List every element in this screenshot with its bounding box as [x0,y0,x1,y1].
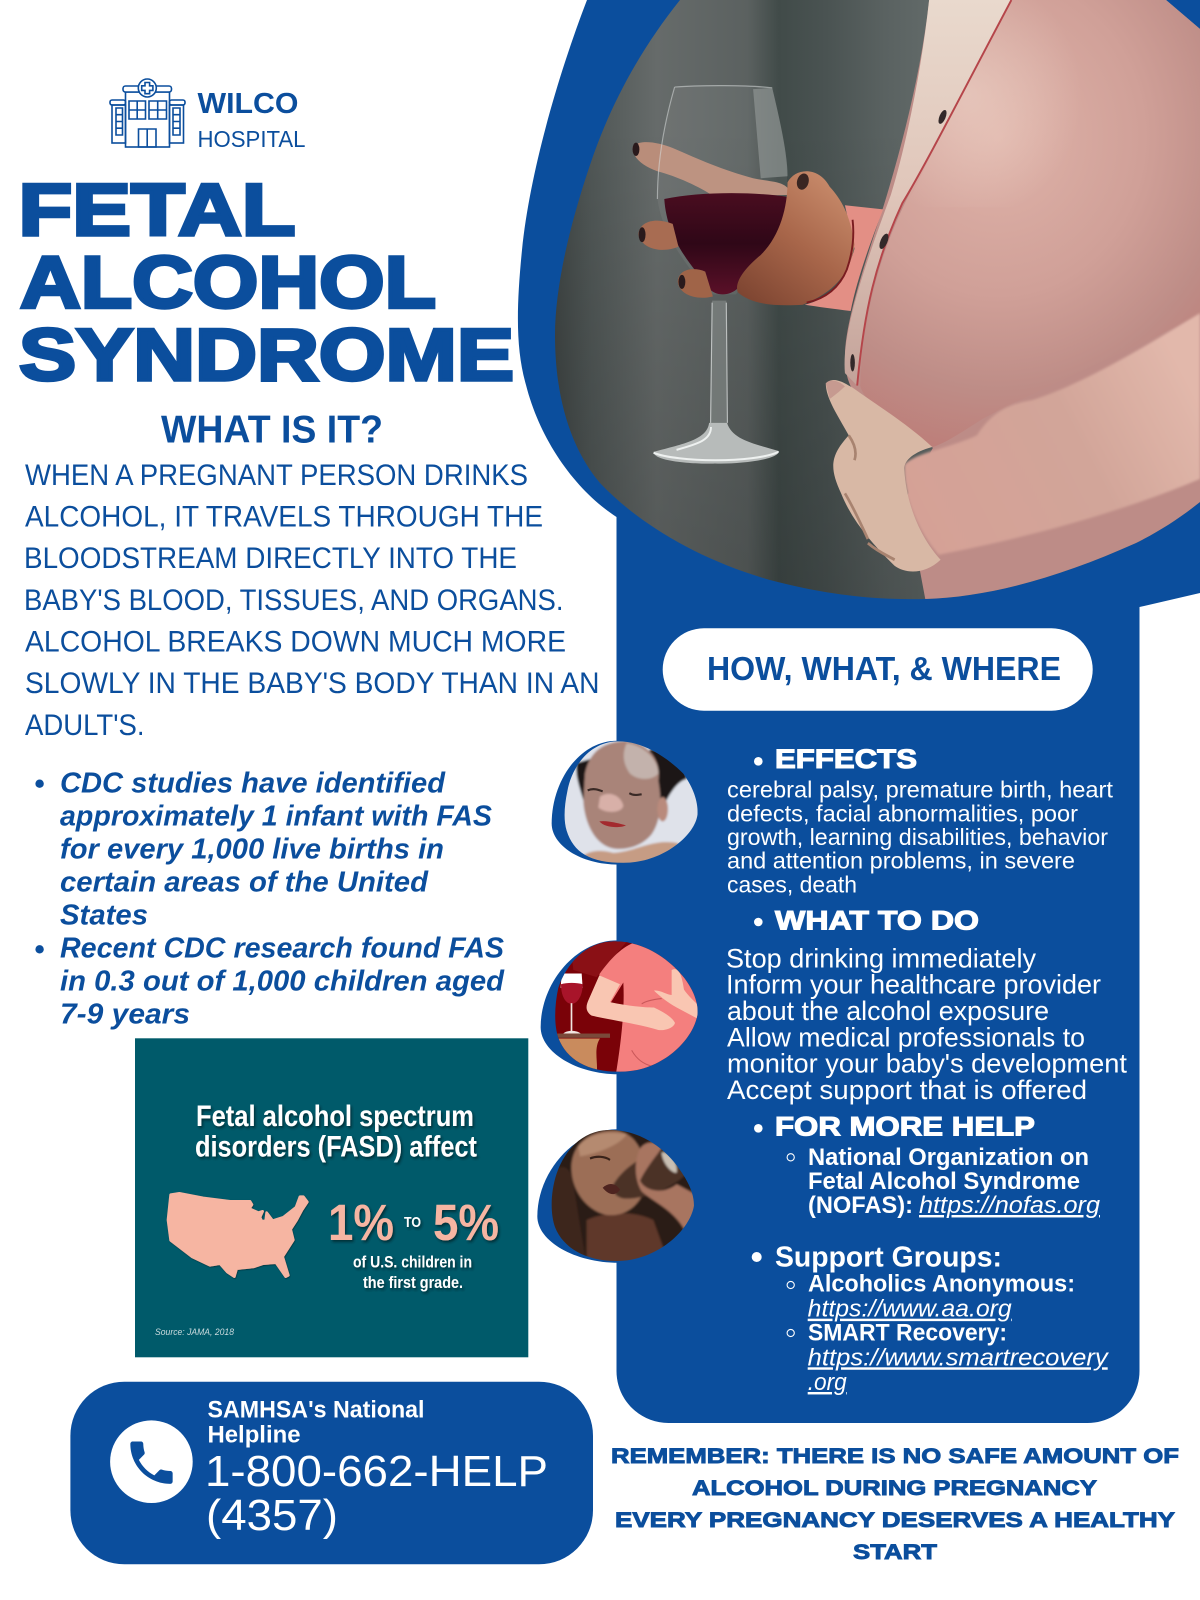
title: ALCOHOL [20,243,436,324]
section: for more help: FOR MORE HELP [775,1111,1035,1141]
section: effects: EFFECTS [775,744,917,774]
bullet list: CDC statistics: 7-9 years [60,998,190,1030]
helpline box [70,1382,593,1564]
helpline text: SAMHSA's National [208,1397,424,1424]
section: what to do: about the alcohol exposure [727,996,1049,1026]
section: for more help: https://nofas.org [919,1192,1100,1219]
section: support groups: https://www.aa.org [808,1296,1012,1323]
section: what to do: monitor your baby's development [727,1049,1128,1079]
map: United States [168,1193,307,1277]
section: what to do: Inform your healthcare provider [726,970,1101,1000]
text block: explanation: BABY'S BLOOD, TISSUES, AND ORGANS. [24,584,564,617]
text block: explanation: SLOWLY IN THE BABY'S BODY THAN IN AN [25,667,600,700]
bullet list: CDC statistics: States [60,899,148,931]
section: what to do: WHAT TO DO [775,905,979,935]
statistic: 1% to 5%: TO [404,1214,421,1231]
pill heading: how, what and where [663,628,1093,711]
section: for more help [754,1111,1100,1219]
section: support groups: https://www.smartrecovery [808,1344,1110,1371]
section: what to do: Accept support that is offered [727,1075,1087,1105]
chart card: FASD prevalence [135,1038,528,1357]
heading: what is it: WHAT IS IT? [161,409,383,452]
wordmark [198,88,306,152]
wordmark: HOSPITAL [198,126,306,152]
statistic caption: of U.S. children in [353,1252,472,1271]
section: effects: cases, death [727,871,857,897]
wordmark: WILCO [198,88,298,120]
text block: explanation: ALCOHOL BREAKS DOWN MUCH MORE [25,626,566,659]
section: what to do: Allow medical professionals to [727,1022,1085,1052]
text block: explanation: ALCOHOL, IT TRAVELS THROUGH THE [25,501,543,534]
section: support groups [752,1242,1110,1396]
callout: no safe amount: ALCOHOL DURING PREGNANCY [692,1476,1097,1500]
title: FETAL [18,170,296,251]
logo: Wilco Hospital [110,79,306,152]
section: support groups: Alcoholics Anonymous: [808,1271,1075,1298]
helpline text: 1-800-662-HELP [205,1448,548,1496]
pill heading: how, what and where: HOW, WHAT, & WHERE [707,650,1061,687]
source note: Source: JAMA, 2018 [155,1327,235,1338]
statistic: 1% to 5%: 5% [433,1194,499,1251]
bullet list: CDC statistics: in 0.3 out of 1,000 children aged [60,965,505,997]
text block: explanation: BLOODSTREAM DIRECTLY INTO THE [24,542,517,575]
bullet list: CDC statistics: Recent CDC research found FAS [60,932,504,964]
section: effects: and attention problems, in severe [727,848,1075,874]
card heading: disorders (FASD) affect [195,1131,477,1164]
title [18,170,514,396]
bullet list: CDC statistics: CDC studies have identified [60,767,446,799]
image blob: infant with FAS [552,738,703,870]
statistic: 1% to 5%: 1% [328,1194,394,1251]
section: what to do: Stop drinking immediately [726,943,1037,973]
section: for more help: Fetal Alcohol Syndrome [808,1168,1080,1195]
helpline text: Helpline [208,1422,300,1449]
callout: no safe amount [611,1444,1179,1564]
bullet list: CDC statistics: certain areas of the United [60,866,429,898]
section: what to do [726,905,1128,1105]
icon: hospital building [110,79,185,147]
helpline text: (4357) [206,1492,338,1540]
section: effects: cerebral palsy, premature birth, heart [727,777,1113,803]
section: support groups: Support Groups: [775,1242,1002,1274]
card heading: Fetal alcohol spectrum [196,1100,474,1133]
callout: no safe amount: START [853,1540,937,1564]
bullet list: CDC statistics: approximately 1 infant with FAS [60,800,492,832]
photo: pregnant person holding a glass of wine [555,0,1200,600]
section: for more help: (NOFAS): [808,1192,913,1219]
callout: no safe amount: REMEMBER: THERE IS NO SAFE AMOUNT OF [611,1444,1179,1468]
statistic: 1% to 5% [328,1194,499,1251]
panel: blue background shape [518,0,1200,1423]
statistic caption: the first grade. [363,1273,463,1292]
section: effects [727,744,1113,897]
title: SYNDROME [19,315,514,396]
text block: explanation [24,459,600,742]
section: support groups: SMART Recovery: [808,1319,1007,1346]
callout: no safe amount: EVERY PREGNANCY DESERVES A HEALTHY [615,1508,1175,1532]
image blob: woman drinking [537,1127,700,1266]
icon: telephone [110,1420,193,1503]
text block: explanation: ADULT'S. [25,709,144,742]
image blob: pregnant woman illustration [541,938,702,1075]
helpline text [205,1397,548,1540]
section: effects: growth, learning disabilities, behavior [727,824,1108,850]
text block: explanation: WHEN A PREGNANT PERSON DRINKS [25,459,528,492]
statistic caption [353,1252,472,1292]
section: for more help: National Organization on [808,1144,1089,1171]
bullet list: CDC statistics: for every 1,000 live births in [60,833,444,865]
bullet list: CDC statistics [35,767,505,1030]
section: support groups: .org [808,1369,847,1396]
section: effects: defects, facial abnormalities, poor [727,800,1078,826]
card heading [195,1100,477,1164]
